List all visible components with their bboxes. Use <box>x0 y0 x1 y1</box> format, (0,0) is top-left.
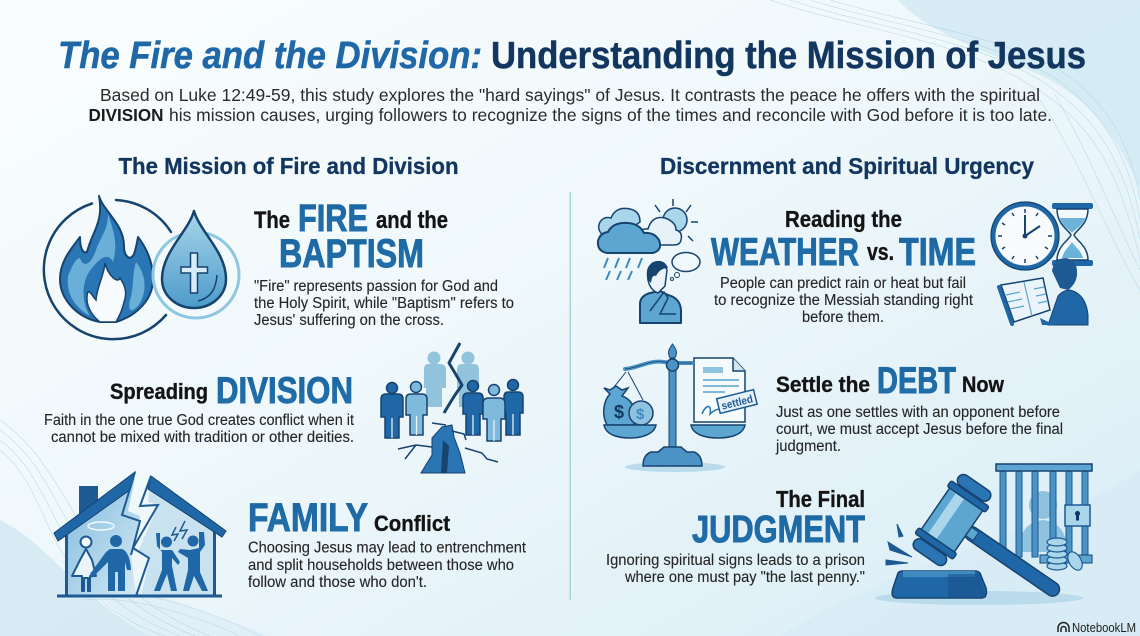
heading: the final judgment: The Final <box>776 486 865 512</box>
heading: reading the weather vs time: vs. <box>867 239 894 266</box>
icon: clock, hourglass and reader <box>991 202 1093 325</box>
intro text <box>88 85 1052 125</box>
heading: the final judgment: JUDGMENT <box>692 509 865 551</box>
icon: flame and water drop <box>44 196 239 339</box>
stamp: settled: settled <box>720 393 754 413</box>
heading: settle the debt: Settle the <box>776 372 870 397</box>
intro text: Based on Luke 12:49-59, this study explores the "hard sayings" of Jesus. It contrasts the peace he offers with the spiritual <box>100 85 1040 105</box>
icon: gavel, prison cell and coins <box>875 464 1092 630</box>
text: fire description: "Fire" represents passion for God and <box>254 278 498 295</box>
text: judgment description <box>606 552 865 586</box>
text: division description <box>44 412 355 446</box>
text: family description <box>248 540 527 591</box>
text: family description: and split households between those who <box>248 557 514 574</box>
heading: spreading division: Spreading <box>110 379 208 404</box>
heading: reading the weather vs time: TIME <box>899 231 976 274</box>
heading: settle the debt: DEBT <box>877 360 956 401</box>
panel: reading the weather vs time <box>598 199 1093 326</box>
intro text: DIVISION <box>88 105 164 125</box>
title <box>58 35 1086 77</box>
text: family description: Choosing Jesus may lead to entrenchment <box>248 540 527 556</box>
panel: the fire and the baptism <box>44 196 514 339</box>
text: debt description: court, we must accept Jesus before the final <box>776 421 1063 438</box>
heading: right column: Discernment and Spiritual Urgency <box>660 153 1034 179</box>
text: fire description: Jesus' suffering on the cross. <box>254 312 444 329</box>
icon: scales with money and settled document: $ <box>636 406 645 423</box>
text: division description: Faith in the one true God creates conflict when it <box>44 412 355 429</box>
text: fire description <box>254 278 514 329</box>
heading: left column: The Mission of Fire and Division <box>118 153 458 179</box>
text: judgment description: where one must pay "the last penny." <box>624 569 865 586</box>
heading: the fire and the baptism: The <box>254 207 290 234</box>
icon: divided people and crack <box>381 343 523 473</box>
panel: family conflict <box>54 472 527 596</box>
panel: spreading division <box>44 343 523 473</box>
heading: the fire and the baptism: and the <box>376 207 448 234</box>
heading: family conflict: Conflict <box>374 511 451 536</box>
heading: the fire and the baptism: FIRE <box>298 198 368 240</box>
text: weather description <box>714 275 974 326</box>
icon: weather and thinking person <box>598 199 700 323</box>
heading: settle the debt: Now <box>962 372 1005 397</box>
text: weather description: People can predict rain or heat but fail <box>720 275 966 292</box>
text: fire description: the Holy Spirit, while "Baptism" refers to <box>254 295 514 312</box>
title: The Fire and the Division: <box>58 35 482 77</box>
heading: the fire and the baptism <box>254 198 448 276</box>
heading: the fire and the baptism: BAPTISM <box>279 232 424 276</box>
panel: settle the debt <box>604 344 1063 472</box>
heading: reading the weather vs time: WEATHER <box>711 231 859 274</box>
title: Understanding the Mission of Jesus <box>491 35 1086 77</box>
panel: the final judgment <box>606 464 1092 630</box>
intro text: his mission causes, urging followers to recognize the signs of the times and reconcile with God before it is too late. <box>169 105 1052 125</box>
heading: family conflict: FAMILY <box>248 496 368 540</box>
heading: spreading division: DIVISION <box>216 370 353 411</box>
text: debt description <box>775 404 1063 455</box>
text: division description: cannot be mixed with tradition or other deities. <box>51 429 354 446</box>
icon: scales with money and settled document <box>604 344 757 472</box>
text: judgment description: Ignoring spiritual signs leads to a prison <box>606 552 865 569</box>
text: debt description: Just as one settles with an opponent before <box>776 404 1060 421</box>
heading: the final judgment <box>692 486 865 551</box>
heading: reading the weather vs time <box>711 206 976 274</box>
text: weather description: to recognize the Messiah standing right <box>714 292 974 309</box>
text: family description: follow and those who don't. <box>248 574 427 591</box>
heading: reading the weather vs time: Reading the <box>785 206 902 232</box>
icon: scales with money and settled document: $ <box>614 402 624 422</box>
heading: settle the debt <box>776 360 1005 401</box>
text: weather description: before them. <box>802 309 884 326</box>
heading: spreading division <box>110 370 353 411</box>
text: debt description: judgment. <box>775 438 841 455</box>
icon: split house with family <box>54 472 226 596</box>
